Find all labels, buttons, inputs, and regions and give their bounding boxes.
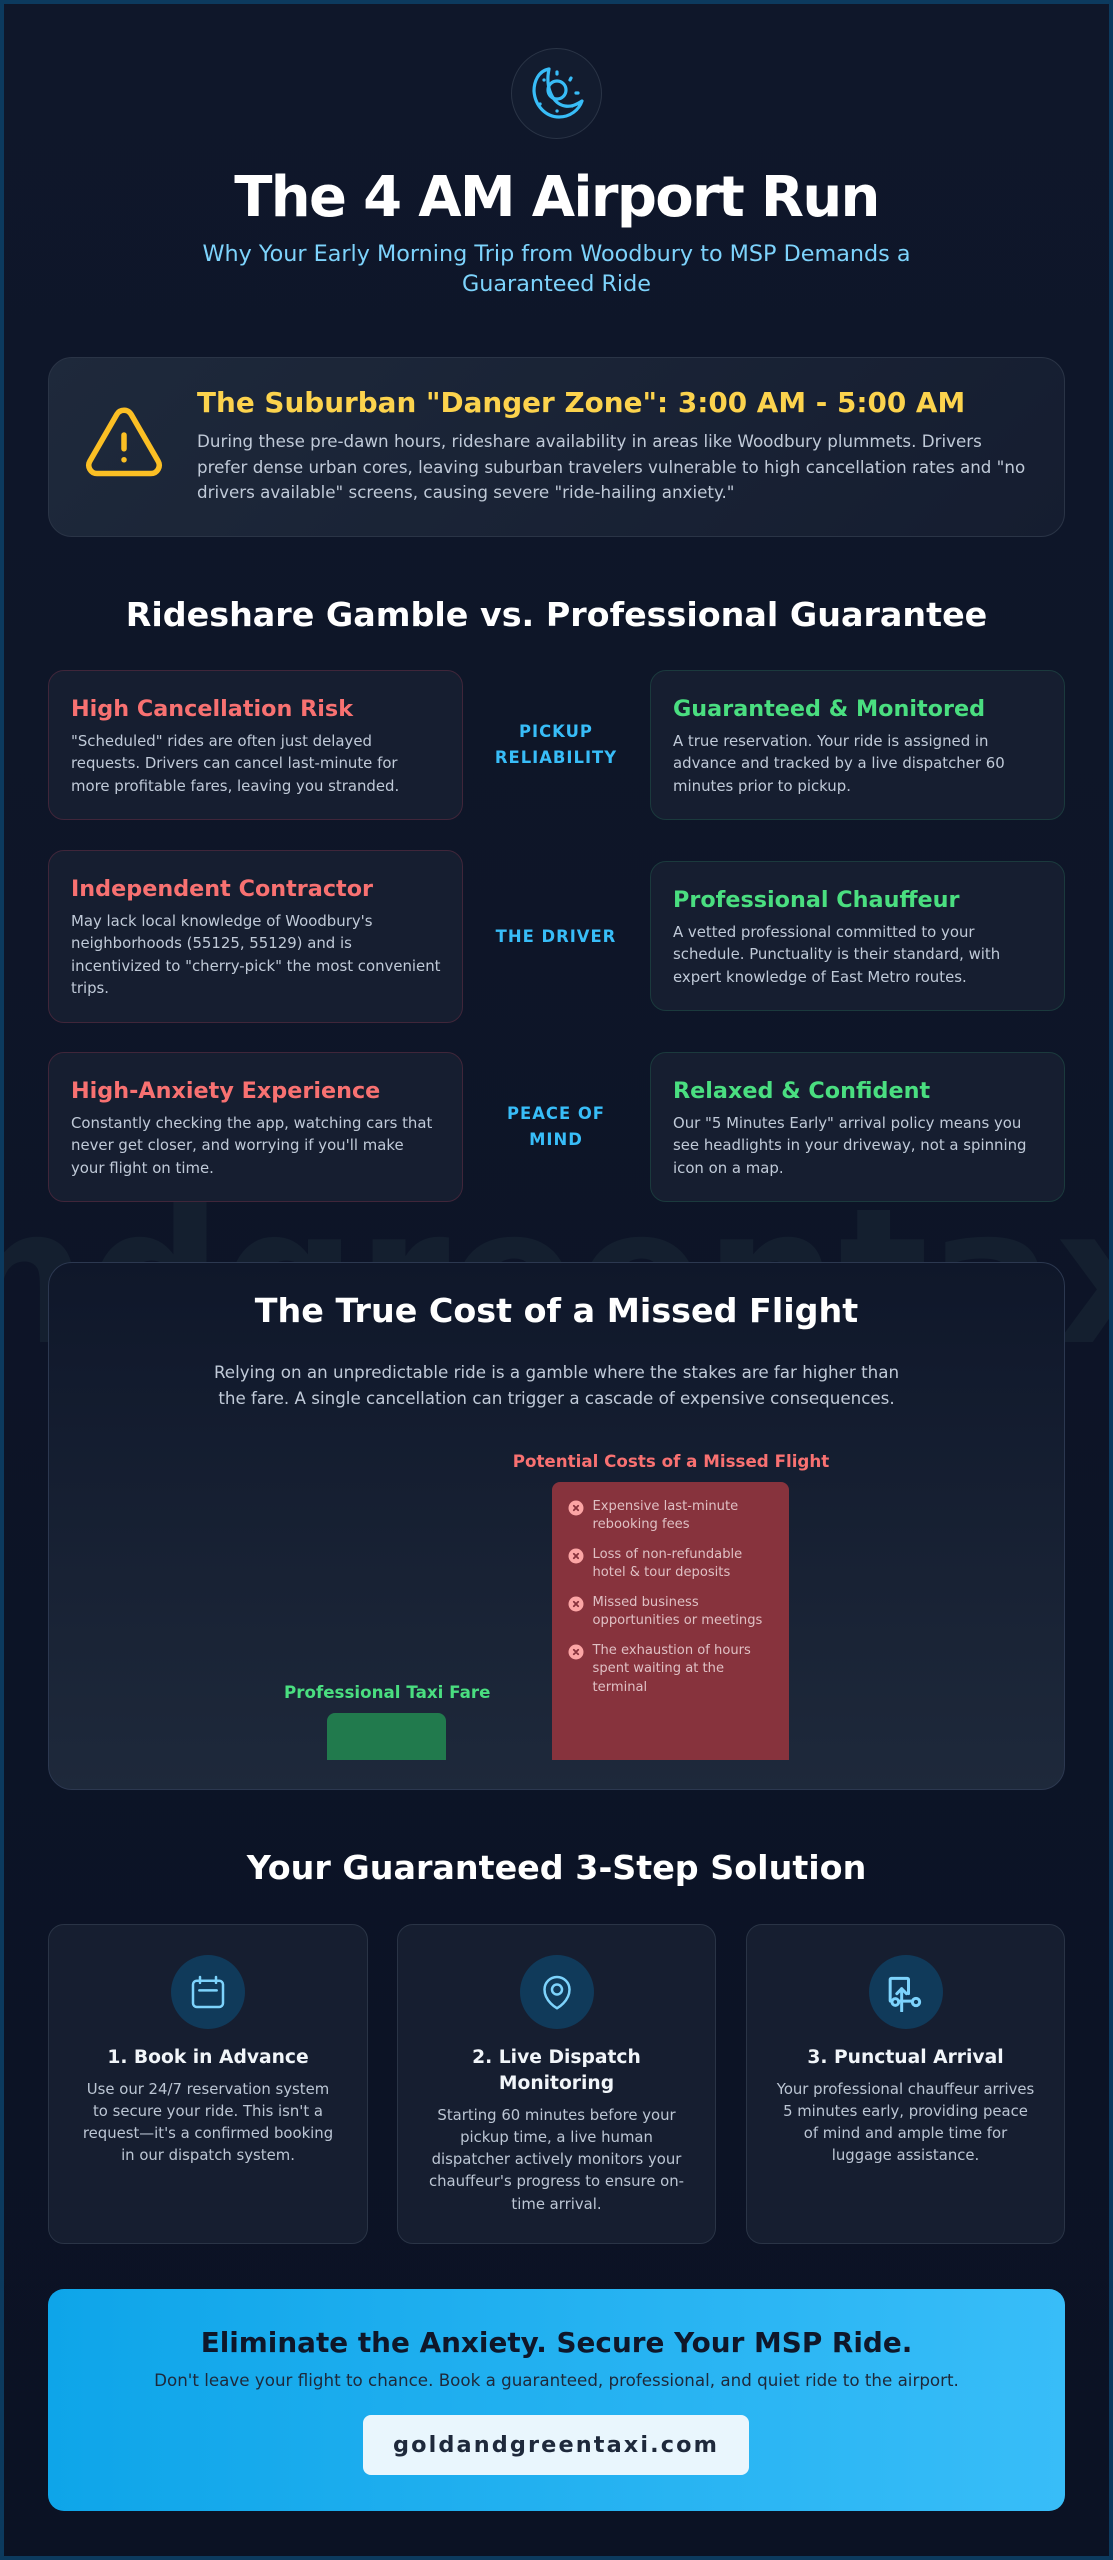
comparison row 1 label: PICKUP: [519, 722, 593, 741]
text: opportunities or meetings: [592, 1613, 762, 1628]
bar: taxi fare: [327, 1713, 446, 1760]
step text: in our dispatch system.: [121, 2146, 295, 2164]
text: [592, 1546, 742, 1580]
text: spent waiting at the: [592, 1661, 724, 1676]
heading: Guaranteed & Monitored: [673, 696, 985, 722]
comparison row 3 label: [507, 1104, 605, 1149]
cost description: Relying on an unpredictable ride is a gamble where the stakes are far higher than: [214, 1362, 899, 1382]
text: The exhaustion of hours: [592, 1642, 751, 1658]
text: advance and tracked by a live dispatcher 60: [673, 754, 1005, 772]
text: A vetted professional committed to your: [673, 923, 975, 941]
icon: x: [568, 1548, 584, 1564]
text: [673, 732, 1005, 795]
subtitle: Why Your Early Morning Trip from Woodbury to MSP Demands a: [202, 240, 911, 266]
step text: Use our 24/7 reservation system: [87, 2080, 329, 2098]
cta heading: Eliminate the Anxiety. Secure Your MSP Ride.: [201, 2326, 912, 2358]
text: Constantly checking the app, watching cars that: [71, 1114, 432, 1132]
text: [71, 732, 399, 795]
cost list item 3: [568, 1594, 762, 1628]
bar chart: fare vs missed flight costs: [284, 1450, 829, 1760]
heading: Independent Contractor: [71, 876, 373, 902]
panel: true cost of a missed flight: [48, 1262, 1065, 1790]
text: neighborhoods (55125, 55129) and is: [71, 934, 352, 952]
icon: warning triangle: [86, 408, 162, 476]
text: [71, 1114, 432, 1177]
subtitle: [202, 240, 911, 296]
icon: map pin: [520, 1955, 594, 2029]
text: Our "5 Minutes Early" arrival policy means you: [673, 1114, 1021, 1132]
step text: of mind and ample time for: [804, 2124, 1007, 2142]
step text: Your professional chauffeur arrives: [777, 2080, 1034, 2098]
step text: time arrival.: [511, 2195, 602, 2213]
text: schedule. Punctuality is their standard, with: [673, 945, 1000, 963]
text: your flight on time.: [71, 1159, 214, 1177]
step card 2: [397, 1924, 716, 2244]
bar label: taxi fare: Professional Taxi Fare: [284, 1682, 490, 1702]
comparison row 1 left: [48, 670, 463, 820]
text: terminal: [592, 1680, 647, 1694]
alert body: drivers available" screens, causing severe "ride-hailing anxiety.": [197, 482, 734, 502]
comparison row 1 label: [495, 722, 617, 767]
icon: x: [568, 1500, 584, 1516]
bar label: potential costs: Potential Costs of a Missed Flight: [513, 1450, 829, 1470]
comparison row 2 right: [650, 861, 1065, 1011]
icon: calendar: [171, 1955, 245, 2029]
text: Loss of non-refundable: [592, 1546, 742, 1562]
comparison row 2 left: [48, 850, 463, 1023]
text: Expensive last-minute: [592, 1498, 738, 1514]
step text: chauffeur's progress to ensure on-: [429, 2172, 684, 2190]
text: expert knowledge of East Metro routes.: [673, 968, 967, 986]
heading: true cost: The True Cost of a Missed Flight: [255, 1291, 858, 1330]
text: rebooking fees: [592, 1517, 690, 1532]
comparison row 3 label: MIND: [529, 1130, 583, 1149]
call to action: [48, 2289, 1065, 2511]
bar: potential costs: [552, 1482, 789, 1760]
step text: pickup time, a live human: [460, 2128, 653, 2146]
step text: [776, 2080, 1034, 2164]
step text: [429, 2106, 684, 2213]
text: icon on a map.: [673, 1159, 784, 1177]
cost list item 2: [568, 1546, 742, 1580]
header icon: moon and clock: [511, 48, 602, 139]
text: [592, 1498, 738, 1532]
text: more profitable fares, leaving you stranded.: [71, 777, 399, 795]
text: see headlights in your driveway, not a spinning: [673, 1136, 1026, 1154]
comparison row 1 label: RELIABILITY: [495, 748, 617, 767]
icon: x: [568, 1596, 584, 1612]
heading: Professional Chauffeur: [673, 886, 960, 912]
step title: [472, 2047, 641, 2094]
cta button: [363, 2415, 749, 2475]
text: [71, 912, 440, 997]
heading: 3-step solution: Your Guaranteed 3-Step Solution: [247, 1848, 866, 1887]
heading: High Cancellation Risk: [71, 696, 353, 722]
subtitle: Guaranteed Ride: [462, 270, 651, 296]
title: The 4 AM Airport Run: [234, 165, 879, 230]
step title: Monitoring: [499, 2073, 614, 2094]
alert body: prefer dense urban cores, leaving suburban travelers vulnerable to high cancellation rates and "no: [197, 457, 1025, 477]
text: [673, 923, 1000, 986]
step text: dispatcher actively monitors your: [432, 2150, 681, 2168]
step text: 5 minutes early, providing peace: [783, 2102, 1028, 2120]
text: Missed business: [592, 1594, 699, 1610]
text: hotel & tour deposits: [592, 1565, 730, 1580]
step text: Starting 60 minutes before your: [437, 2106, 676, 2124]
text: [673, 1114, 1026, 1177]
step title: 2. Live Dispatch: [472, 2047, 641, 2068]
cost list item 4: [568, 1642, 751, 1694]
text: A true reservation. Your ride is assigned in: [673, 732, 988, 750]
step text: luggage assistance.: [832, 2146, 979, 2164]
heading: comparison: Rideshare Gamble vs. Professional Guarantee: [126, 595, 987, 634]
text: [592, 1594, 762, 1628]
text: May lack local knowledge of Woodbury's: [71, 912, 372, 930]
step text: request—it's a confirmed booking: [83, 2124, 333, 2142]
text: minutes prior to pickup.: [673, 777, 851, 795]
comparison row 3 label: PEACE OF: [507, 1104, 605, 1123]
text: "Scheduled" rides are often just delayed: [71, 732, 372, 750]
cta text: Don't leave your flight to chance. Book a guaranteed, professional, and quiet ride to the airport.: [154, 2370, 959, 2390]
step card 1: [48, 1924, 368, 2244]
heading: High-Anxiety Experience: [71, 1078, 380, 1104]
panel: danger zone alert: [48, 357, 1065, 537]
cost list item 1: [568, 1498, 738, 1532]
icon: arrival: [869, 1955, 943, 2029]
step text: to secure your ride. This isn't a: [93, 2102, 323, 2120]
text: never get closer, and worrying if you'll make: [71, 1136, 404, 1154]
icon: x: [568, 1644, 584, 1660]
text: [592, 1642, 751, 1694]
alert body: During these pre-dawn hours, rideshare availability in areas like Woodbury plummets. Drivers: [197, 431, 982, 451]
cta button: goldandgreentaxi.com: [393, 2432, 719, 2458]
alert heading: The Suburban "Danger Zone": 3:00 AM - 5:00 AM: [197, 386, 965, 419]
cost description: [214, 1362, 899, 1408]
alert body: [197, 431, 1025, 502]
comparison row 1 right: [650, 670, 1065, 820]
step card 3: [746, 1924, 1065, 2244]
text: trips.: [71, 979, 109, 997]
heading: Relaxed & Confident: [673, 1078, 930, 1104]
step title: 1. Book in Advance: [107, 2047, 309, 2068]
comparison row 2 label: THE DRIVER: [496, 926, 616, 946]
comparison row 3 right: [650, 1052, 1065, 1202]
comparison row 3 left: [48, 1052, 463, 1202]
text: incentivized to "cherry-pick" the most convenient: [71, 957, 440, 975]
text: requests. Drivers can cancel last-minute for: [71, 754, 398, 772]
cost description: the fare. A single cancellation can trigger a cascade of expensive consequences.: [218, 1388, 895, 1408]
step text: [83, 2080, 333, 2164]
step title: 3. Punctual Arrival: [807, 2047, 1004, 2068]
